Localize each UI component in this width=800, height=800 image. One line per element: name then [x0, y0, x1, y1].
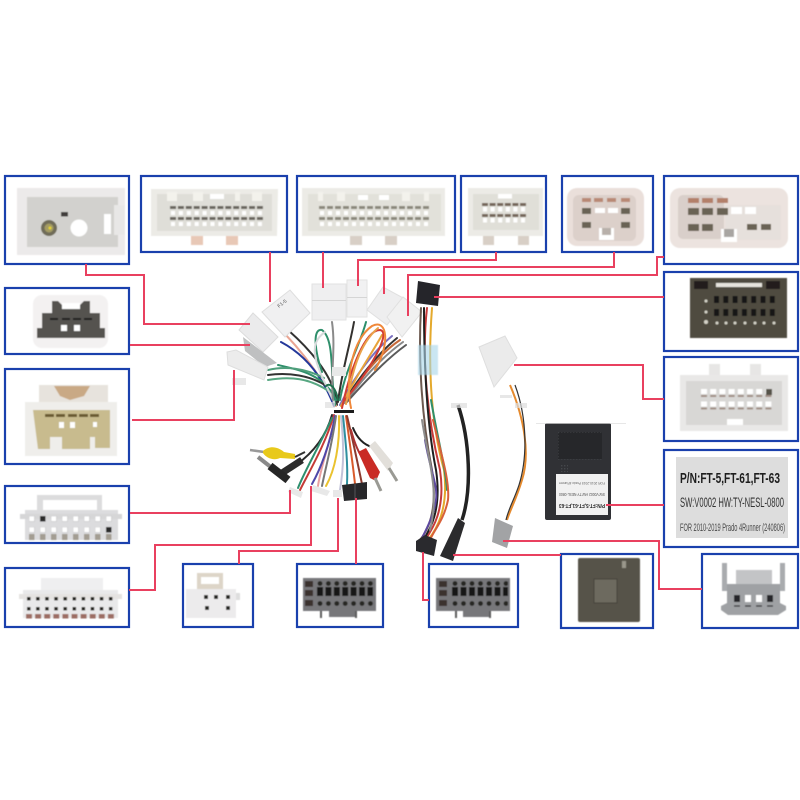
yellow RCA plug: [250, 447, 305, 459]
panel: module label with part numbers: [664, 450, 798, 547]
connector: small white inline: [332, 367, 346, 376]
cable tie: [334, 410, 354, 413]
panel: 16-pin module connector: [664, 357, 798, 441]
panel: 12-pin white connector: [461, 176, 546, 252]
pigtail gray connector: [492, 518, 513, 548]
wires: upper bundle: [268, 322, 406, 408]
panel: 28-pin white connector: [297, 176, 455, 252]
connector: gray lower housing: [243, 337, 277, 367]
connector: upper-left white and gray: [239, 313, 278, 352]
panel: 8-pin pinkish connector: [562, 176, 653, 252]
main wiring harness: [227, 280, 422, 501]
black antenna cable: [440, 405, 468, 561]
connector: top center narrow block: [347, 280, 367, 317]
panel: gray 4-pin connector: [702, 554, 798, 628]
small white plug one: [288, 487, 303, 498]
faint image artifacts: [232, 378, 626, 424]
top black quad-lock plug: [416, 281, 440, 306]
center quad-lock cable: [416, 281, 448, 556]
connector: top center block: [312, 284, 346, 320]
panel: gray 20-pin connector (harness): [297, 564, 383, 627]
black plug pair: [342, 482, 367, 501]
module white label: P/N:FT-5,FT-61,FT-63: [559, 502, 605, 508]
module pigtail cable: [479, 336, 526, 548]
connector marking: F1-5: [277, 298, 289, 310]
artifact smudge: [418, 345, 438, 375]
panel: tan 5-pin connector: [5, 369, 129, 464]
connector: upper-right white: [367, 287, 407, 325]
module white label: SW:V0002 HW:TY-NESL-0800: [559, 492, 605, 497]
connector: upper-right front white: [387, 297, 422, 337]
small white plug two: [311, 485, 330, 496]
panel: dark 16-pin connector: [664, 272, 798, 351]
panel: white connector with dark 4-pin cavity: [5, 288, 129, 354]
antenna plug: [440, 518, 465, 561]
panel: 10-pin pinkish connector: [664, 176, 798, 264]
leader lines: [86, 252, 702, 600]
black 3.5mm jack: [258, 457, 302, 480]
panel: coaxial antenna connector: [5, 176, 129, 264]
panel: 24-pin white connector: [141, 176, 287, 252]
panel: small white 6-pin connector: [183, 564, 253, 627]
red RCA plug: [358, 448, 381, 491]
module white label: FOR 2010-2019 Prado 4Runner: [558, 481, 605, 486]
bottom black quad-lock plug: [416, 535, 437, 556]
panel: white 20-pin connector with latch: [5, 568, 129, 627]
CAN decoder module: [545, 423, 611, 520]
pigtail white connector: [479, 336, 517, 387]
module speaker holes: [560, 464, 568, 472]
connector: left white: [227, 350, 268, 380]
panel: gray 20-pin connector (quad-lock): [429, 564, 518, 627]
small white plug three: [333, 490, 342, 497]
module screen window: [558, 432, 602, 459]
white RCA plug: [369, 441, 397, 481]
panel: white 16-pin connector with latch: [5, 486, 129, 543]
panel: dark square socket: [561, 554, 653, 628]
module white label: [556, 474, 608, 515]
wires: lower bundle: [296, 415, 372, 490]
connector F1-5: [262, 290, 310, 337]
